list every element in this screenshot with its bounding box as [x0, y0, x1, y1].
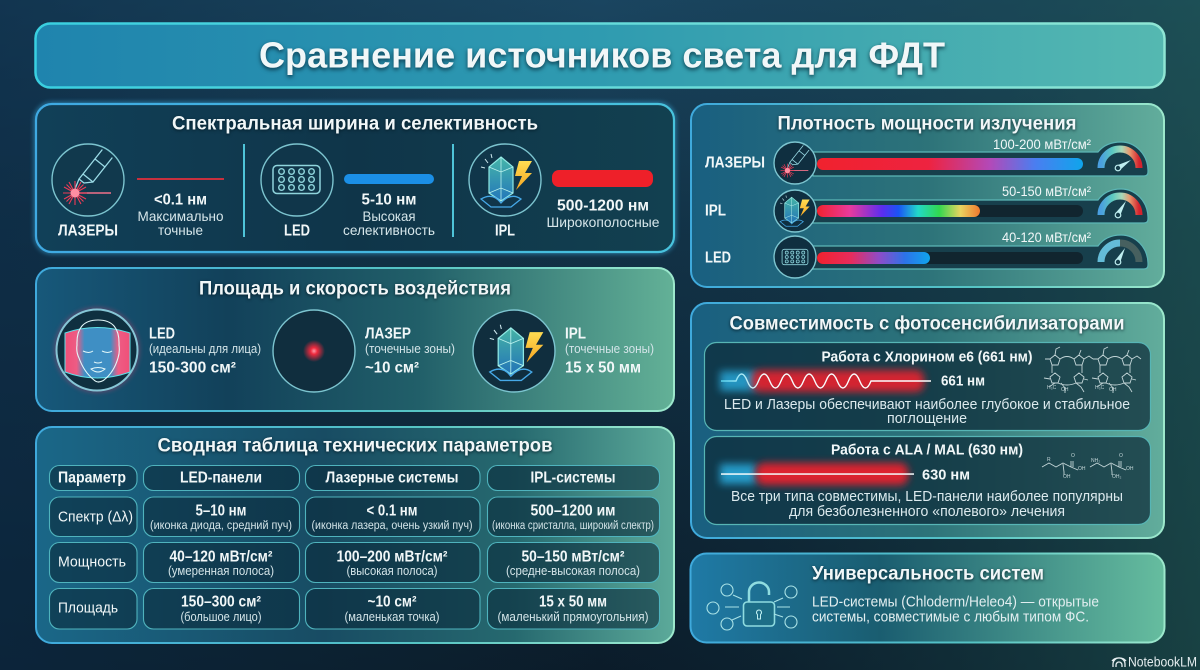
table row: power: [50, 542, 660, 582]
text: IPL area: IPL: [565, 326, 586, 342]
table header row: Лазерные системы: [326, 470, 458, 486]
card: chlorin e6: [704, 342, 1150, 430]
text: LED area: [149, 326, 261, 376]
table row: area: ~10 см²: [368, 594, 416, 610]
heading: summary table: Сводная таблица технических параметров: [158, 436, 552, 456]
text: LED area: LED: [149, 326, 175, 342]
beam: 630 nm: [720, 463, 914, 485]
text: laser area: (точечные зоны): [365, 342, 455, 356]
row: LED power: LED: [705, 250, 731, 266]
text: laser area: ~10 см²: [365, 360, 419, 376]
wave: 661 nm: [720, 370, 931, 392]
molecule: MAL: O: [1119, 453, 1123, 459]
card: ALA / MAL: для безболезненного «полевого» лечения: [789, 504, 1065, 520]
table row: spectrum: Спектр (Δλ): [58, 508, 133, 526]
table header row: IPL-системы: [530, 470, 616, 486]
molecule: ALA: O: [1071, 453, 1075, 459]
row: lasers power: ЛАЗЕРЫ: [705, 154, 765, 172]
icon: open lock with molecules: [707, 582, 797, 630]
icon: IPL crystal large: [473, 310, 555, 392]
text: laser spectrum: [138, 192, 224, 238]
table row: area: 150–300 см²: [181, 594, 261, 610]
table row: power: Мощность: [58, 554, 126, 570]
label: lasers: ЛАЗЕРЫ: [58, 222, 118, 240]
molecule: chlorin left: [1044, 347, 1093, 393]
panel: area and speed: [36, 268, 674, 411]
molecule: ALA: R: [1047, 457, 1051, 463]
row: LED power: [705, 229, 1148, 278]
table row: spectrum: (иконка лазера, очень узкий пуч): [312, 520, 473, 532]
card: ALA / MAL: 630 нм: [922, 466, 970, 484]
label: IPL: IPL: [495, 222, 515, 240]
molecule: chlorin left: OH: [1061, 387, 1069, 393]
table row: spectrum: (иконка диода, средний пуч): [150, 520, 292, 532]
panel: photosensitizer compatibility: [691, 303, 1164, 538]
card: chlorin e6: LED и Лазеры обеспечивают наиболее глубокое и стабильное: [724, 397, 1130, 413]
text: LED area: 150-300 см²: [149, 360, 236, 376]
table row: area: (большое лицо): [180, 610, 262, 624]
table row: area: (маленький прямоугольния): [498, 610, 648, 624]
table row: power: (умеренная полоса): [168, 564, 274, 578]
molecule: MAL: [1090, 453, 1134, 480]
text: laser area: [365, 326, 455, 376]
table header row: [50, 466, 660, 490]
table row: power: 100–200 мВт/см²: [336, 548, 448, 566]
molecule: MAL: OH: [1126, 466, 1134, 472]
molecule: ALA: OH: [1078, 466, 1086, 472]
text: IPL area: (точечные зоны): [565, 342, 654, 356]
table row: power: (высокая полоса): [346, 564, 438, 578]
text: universality: [812, 594, 1099, 626]
heading: universality: Универсальность систем: [812, 564, 1044, 584]
table header row: LED-панели: [180, 470, 262, 486]
table row: spectrum: < 0.1 нм: [366, 502, 418, 520]
spectrum bar: LED: [344, 174, 434, 184]
card: ALA / MAL: [704, 436, 1150, 524]
text: IPL area: 15 x 50 мм: [565, 360, 641, 376]
heading: power density: Плотность мощности излучения: [778, 114, 1076, 134]
table row: spectrum: 500–1200 им: [530, 502, 616, 520]
molecule: MAL: NH₂: [1091, 458, 1100, 464]
text: IPL spectrum: 500-1200 нм: [557, 198, 649, 214]
row: lasers power: [705, 136, 1148, 184]
table row: area: 15 x 50 мм: [539, 594, 607, 610]
text: LED spectrum: селективность: [343, 222, 435, 238]
molecule: ALA: [1042, 453, 1086, 480]
table: [50, 466, 660, 629]
card: ALA / MAL: Все три типа совместимы, LED-панели наиболее популярны: [731, 489, 1123, 505]
panel: spectral width and selectivity: [36, 104, 674, 252]
text: IPL spectrum: Широкополосные: [546, 214, 660, 230]
text: laser spectrum: точные: [158, 222, 203, 238]
text: LED area: (идеальны для лица): [149, 342, 261, 356]
card: ALA / MAL: Работа с ALA / MAL (630 нм): [831, 442, 1023, 458]
text: LED spectrum: [343, 192, 435, 238]
title banner: [36, 24, 1164, 88]
molecule: chlorin right: [1092, 347, 1141, 393]
row: IPL power: 50-150 мВт/см²: [1002, 183, 1091, 199]
table row: power: (средне-высокая полоса): [506, 564, 640, 578]
card: chlorin e6: поглощение: [887, 411, 967, 427]
table row: power: 40–120 мВт/см²: [170, 548, 272, 566]
main title: Сравнение источников света для ФДТ: [259, 34, 945, 76]
table row: area: Площадь: [58, 600, 118, 616]
text: LED spectrum: 5-10 нм: [362, 192, 416, 208]
icon: IPL crystal: [469, 144, 541, 216]
table header row: Параметр: [58, 470, 126, 486]
heading: compatibility: Совместимость с фотосенсибилизаторами: [730, 314, 1124, 334]
table row: spectrum: (иконка сристалла, широкий слектр): [492, 520, 654, 532]
table row: power: 50–150 мВт/см²: [522, 548, 624, 566]
molecule: ALA: OH: [1063, 474, 1071, 480]
panel: system universality: [690, 554, 1164, 642]
table row: area: (маленькая точка): [344, 610, 440, 624]
icon: face under LED: [54, 307, 140, 393]
text: laser spectrum: Максимально: [138, 208, 224, 224]
text: universality: LED-системы (Chloderm/Heleo4) — открытые: [812, 594, 1099, 610]
molecule: MAL: OH₂: [1112, 474, 1122, 480]
panel: power density: [691, 104, 1164, 287]
panel: summary table: [36, 427, 674, 643]
molecule: chlorin right: H₃C: [1095, 385, 1105, 391]
table row: area: [50, 588, 660, 629]
text: universality: системы, совместимые с любым типом ФС.: [812, 608, 1089, 626]
spectrum bar: IPL: [552, 170, 653, 187]
icon: LED panel: [261, 144, 333, 216]
row: lasers power: 100-200 мВт/см²: [993, 136, 1091, 152]
text: LED spectrum: Высокая: [362, 208, 416, 224]
row: IPL power: [705, 183, 1148, 232]
card: chlorin e6: 661 нм: [941, 372, 985, 390]
spectrum line: laser: [137, 178, 224, 180]
text: laser area: ЛАЗЕР: [365, 326, 411, 342]
table row: spectrum: [50, 497, 660, 536]
icon: laser spot: [273, 310, 355, 392]
heading: spectral width: Спектральная ширина и селективность: [172, 114, 538, 134]
molecule: chlorin right: OH: [1109, 387, 1117, 393]
card: chlorin e6: Работа с Хлорином е6 (661 нм): [822, 348, 1033, 366]
row: LED power: 40-120 мВт/см²: [1002, 229, 1091, 245]
text: IPL spectrum: [546, 198, 660, 230]
text: laser spectrum: <0.1 нм: [154, 192, 207, 208]
heading: area and speed: Площадь и скорость воздействия: [199, 278, 511, 300]
icon: laser handpiece: [52, 144, 124, 216]
label: LED: LED: [284, 222, 310, 240]
molecule: chlorin left: H₃C: [1047, 385, 1057, 391]
text: IPL area: [565, 326, 654, 376]
table row: spectrum: 5–10 нм: [196, 502, 246, 520]
row: IPL power: IPL: [705, 202, 726, 220]
